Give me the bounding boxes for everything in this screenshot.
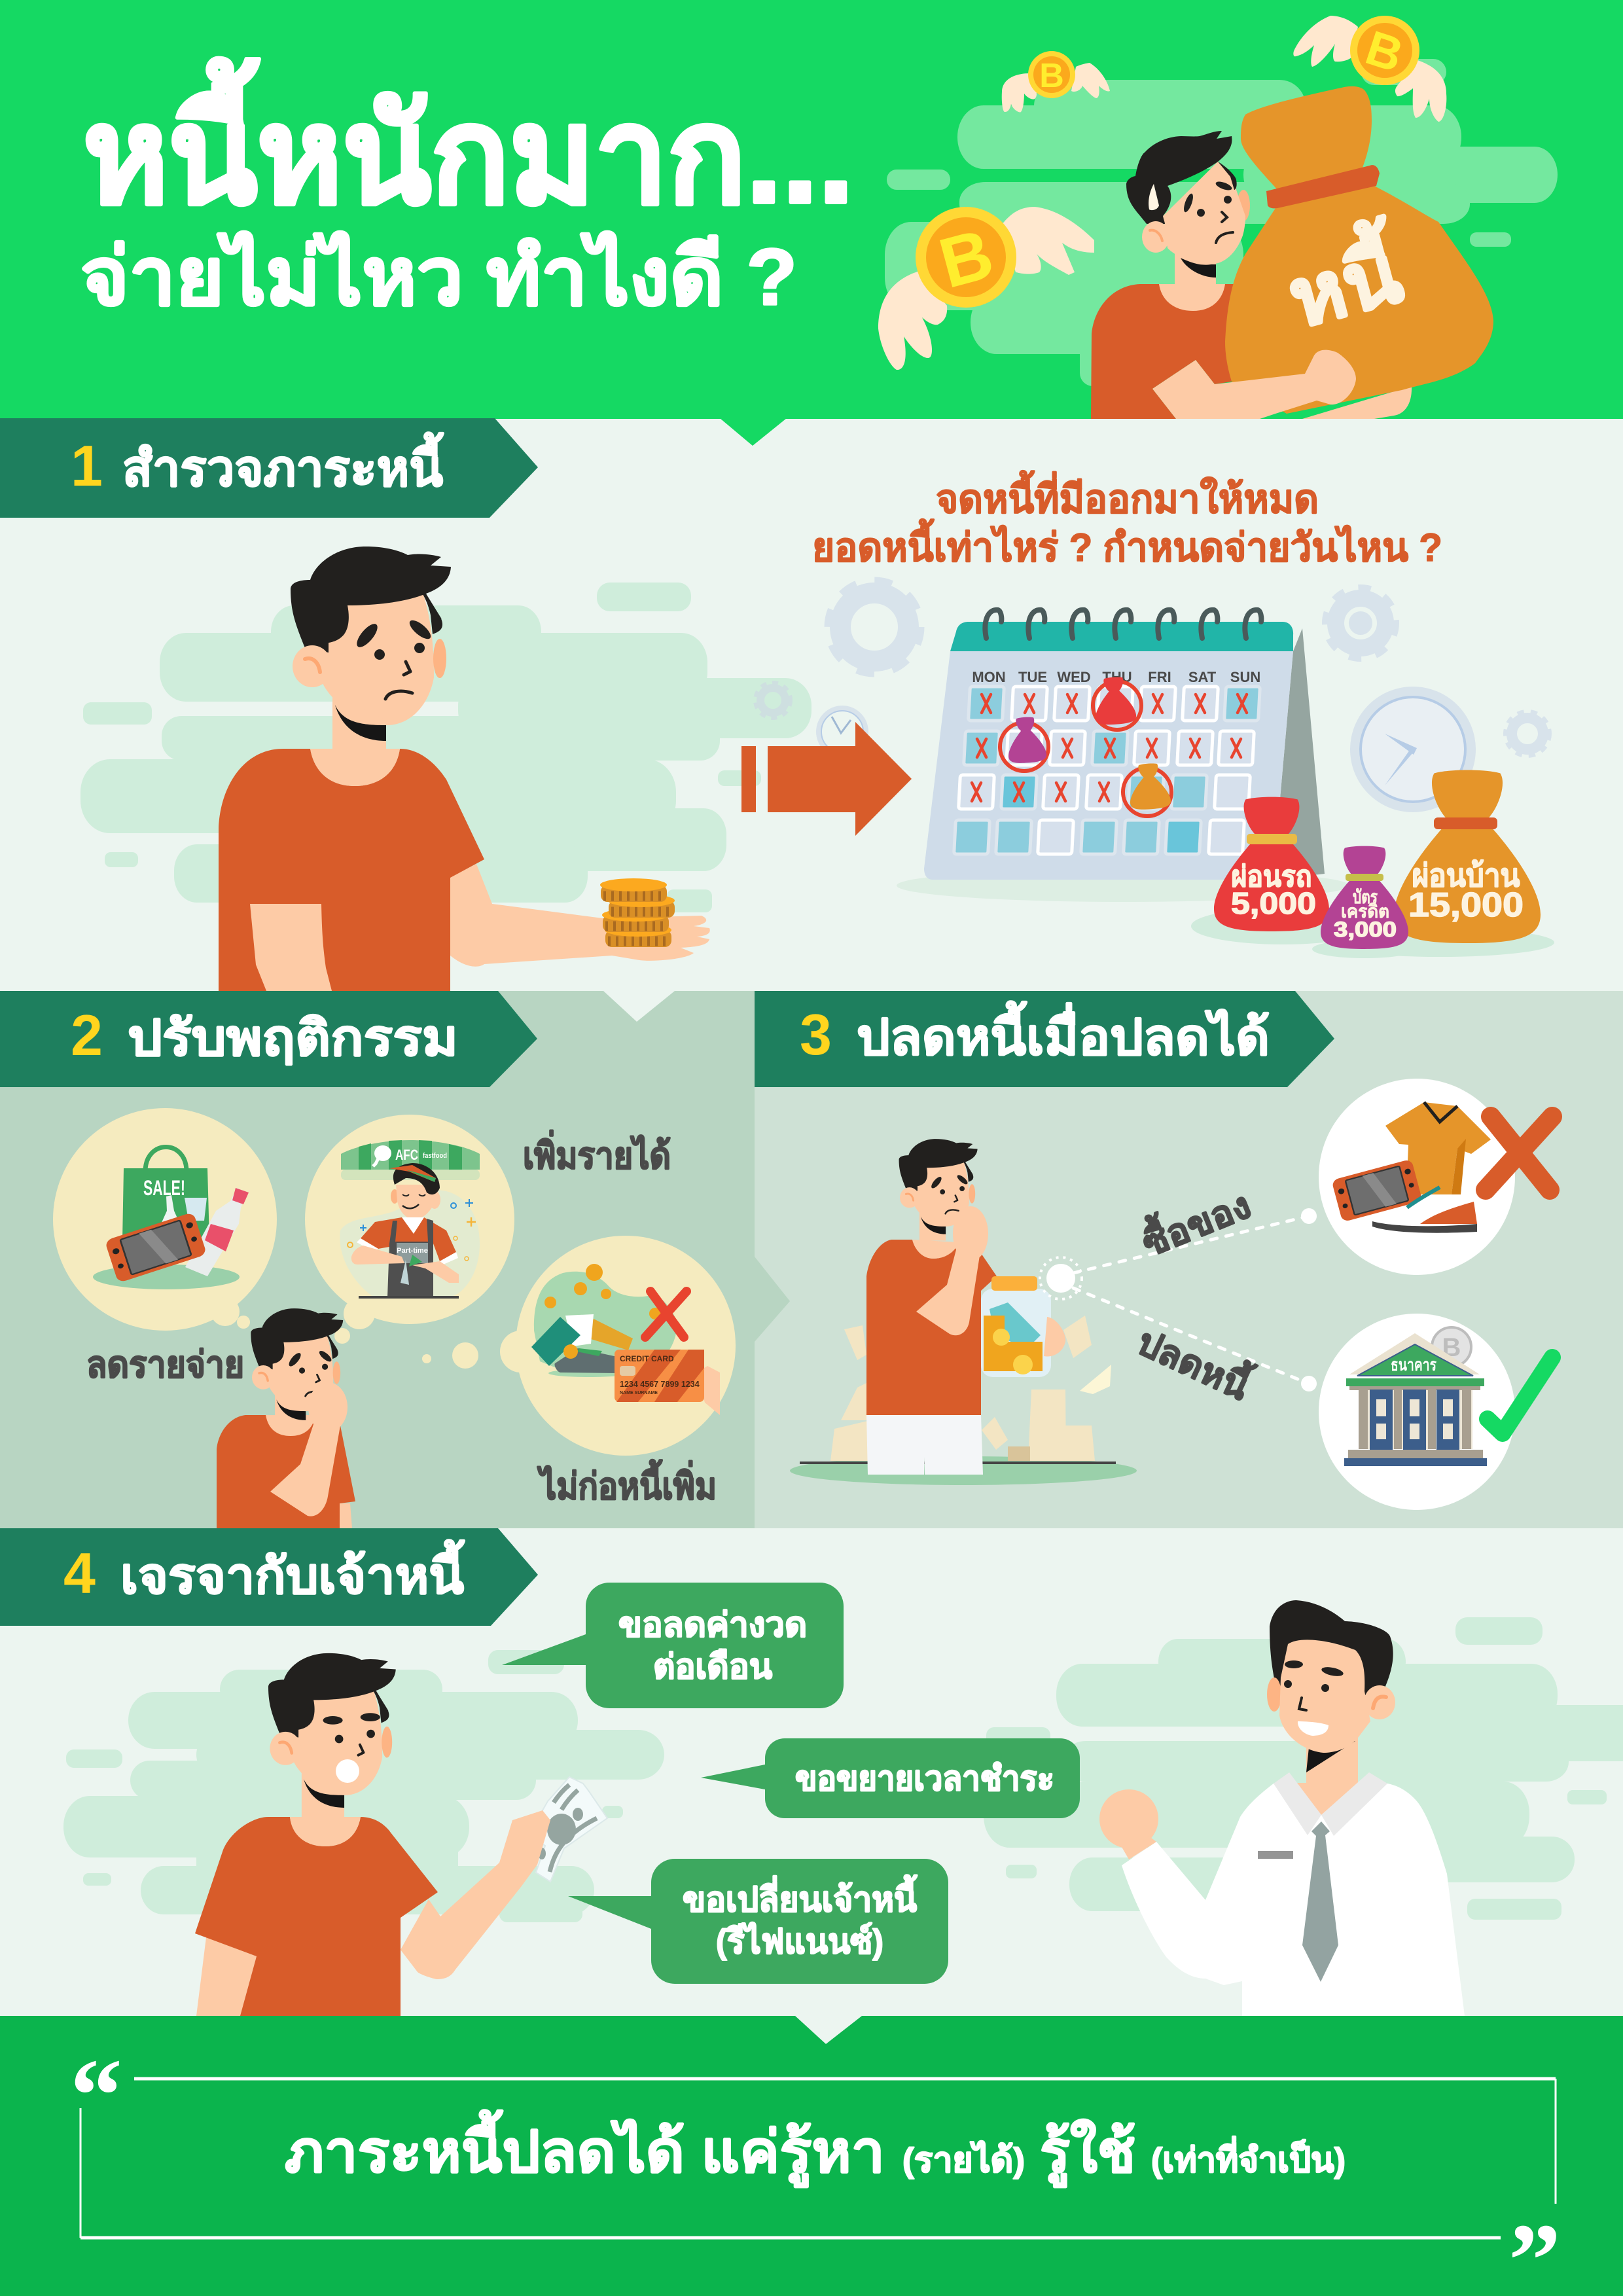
thought bubble: no new debt bbox=[500, 1236, 736, 1456]
panel: section 4 negotiate bbox=[0, 1528, 1623, 2016]
icon: winged coin large bbox=[878, 207, 1094, 370]
speech bubble: refinance: ขอเปลี่ยนเจ้าหนี้ bbox=[683, 1874, 918, 1919]
bag: credit card: เครดิต bbox=[1341, 901, 1389, 922]
icon: red cross bbox=[645, 1291, 687, 1337]
circle: bank with check: ธนาคาร bbox=[1391, 1355, 1436, 1374]
bag: credit card: บัตร bbox=[1353, 887, 1378, 907]
bag: home payment: ผ่อนบ้าน bbox=[1412, 859, 1520, 893]
calendar cells bbox=[954, 687, 1260, 854]
banner: step 4: เจรจากับเจ้าหนี้ bbox=[120, 1539, 465, 1604]
worried head bbox=[1126, 131, 1250, 265]
shoe bbox=[1372, 1187, 1477, 1233]
focus point with dotted paths bbox=[1040, 1208, 1317, 1391]
bag: home payment bbox=[1394, 770, 1541, 943]
icon: winged coin top right: B bbox=[1359, 20, 1410, 82]
panel: footer bbox=[0, 2016, 1623, 2296]
panel: section 1 survey debt bbox=[0, 418, 1554, 991]
man with money bbox=[195, 1653, 607, 2016]
frame bbox=[80, 2079, 1556, 2238]
shop awning: AFC bbox=[395, 1147, 418, 1163]
notch bbox=[720, 418, 787, 446]
notch bbox=[795, 2016, 862, 2044]
background cloud bbox=[80, 583, 812, 912]
banner: step 1: 1 bbox=[71, 433, 103, 498]
calendar weekdays: FRI bbox=[1148, 669, 1171, 685]
banner: step 1 bbox=[0, 418, 538, 518]
debt bag bbox=[1152, 86, 1493, 419]
orange credit card: NAME SURNAME bbox=[620, 1391, 658, 1395]
subtitle: จ่ายไม่ไหว ทำไงดี ? bbox=[80, 232, 797, 321]
icon: winged coin large: B bbox=[931, 213, 1001, 303]
man with savings jar bbox=[790, 1139, 1137, 1485]
orange credit card: CREDIT CARD bbox=[620, 1354, 674, 1363]
coins bbox=[544, 1264, 661, 1319]
man holding coins bbox=[219, 547, 710, 991]
label: no new debt: ไม่ก่อหนี้เพิ่ม bbox=[537, 1460, 717, 1507]
bag: car payment: ผ่อนรถ bbox=[1232, 861, 1311, 893]
circle: bank with check: B bbox=[1442, 1333, 1461, 1362]
orange credit card: 1234 4567 7899 1234 bbox=[620, 1380, 700, 1389]
banner: step 2: 2 bbox=[71, 1003, 103, 1067]
banner: step 2 bbox=[0, 991, 537, 1087]
speech bubble: refinance bbox=[568, 1859, 948, 1984]
conclusion text: (เท่าที่จำเป็น) bbox=[1151, 2136, 1346, 2179]
calendar weekdays: MON bbox=[972, 669, 1006, 685]
notch bbox=[603, 991, 675, 1022]
bag: car payment: 5,000 bbox=[1231, 886, 1316, 920]
calendar weekdays: THU bbox=[1102, 669, 1132, 685]
speech bubble: reduce installment bbox=[502, 1583, 844, 1708]
speech bubble: extend time: ขอขยายเวลาชำระ bbox=[795, 1760, 1054, 1798]
icon: clock bbox=[1350, 687, 1476, 812]
icon: winged coin small: B bbox=[1039, 57, 1064, 95]
banner: step 4: 4 bbox=[63, 1541, 96, 1605]
title: หนี้หนักมาก... bbox=[83, 58, 854, 231]
bag: credit card bbox=[1321, 846, 1408, 949]
conclusion text: ภาระหนี้ปลดได้ แค่รู้หา bbox=[285, 2109, 885, 2188]
heading: list all debts: ยอดหนี้เท่าไหร่ ? กำหนดจ่ายวันไหน ? bbox=[812, 518, 1442, 569]
label: increase income: เพิ่มรายได้ bbox=[523, 1130, 671, 1176]
heading: list all debts: จดหนี้ที่มีออกมาให้หมด bbox=[936, 470, 1319, 521]
icon: winged coin top right bbox=[1293, 16, 1446, 122]
banner: step 4 bbox=[0, 1528, 538, 1626]
arrow bbox=[741, 722, 912, 836]
icon: coin stack bbox=[600, 878, 675, 947]
thought bubble: earn more bbox=[305, 1115, 514, 1329]
opening quote mark: “ bbox=[70, 2037, 122, 2153]
circle: bank with check bbox=[1319, 1314, 1552, 1510]
banner: step 3 bbox=[755, 991, 1334, 1087]
speech bubble: reduce installment: ขอลดค่างวด bbox=[618, 1606, 807, 1644]
debt bag: หนี้ bbox=[1276, 214, 1412, 345]
label: pay off debt: ปลดหนี้ bbox=[1131, 1316, 1258, 1408]
panel: section 3 pay off debt bbox=[755, 991, 1623, 1528]
banner: step 2: ปรับพฤติกรรม bbox=[128, 1011, 458, 1066]
speech bubble: reduce installment: ต่อเดือน bbox=[653, 1648, 772, 1686]
icon: cross bbox=[1486, 1117, 1552, 1190]
speech bubble: extend time bbox=[701, 1738, 1080, 1818]
background cloud left bbox=[63, 1650, 664, 1922]
banner: step 3: ปลดหนี้เมื่อปลดได้ bbox=[857, 1001, 1270, 1066]
panel: header bbox=[0, 0, 1623, 446]
savings jar bbox=[981, 1276, 1051, 1377]
sparkles bbox=[348, 1199, 476, 1261]
calendar weekdays: SAT bbox=[1188, 669, 1217, 685]
thought bubble: reduce spending bbox=[53, 1108, 277, 1331]
t-shirt bbox=[1385, 1102, 1491, 1194]
banknotes bbox=[529, 1777, 607, 1882]
conclusion text: รู้ใช้ bbox=[1040, 2119, 1135, 2188]
shop awning bbox=[341, 1140, 480, 1180]
thinking man bbox=[217, 1308, 355, 1528]
calendar weekdays bbox=[972, 669, 1260, 685]
shop awning: fastfood bbox=[423, 1152, 447, 1160]
conclusion text: (รายได้) bbox=[902, 2140, 1025, 2179]
man carrying debt bag bbox=[1091, 131, 1412, 419]
worker: Part-time bbox=[397, 1247, 428, 1255]
header background cloud bbox=[885, 59, 1558, 386]
banner: step 1: สำรวจภาระหนี้ bbox=[122, 432, 444, 497]
calendar bbox=[897, 610, 1349, 902]
paper piles bbox=[830, 1316, 1111, 1461]
credit cards and reader bbox=[531, 1314, 633, 1373]
icon: small clock bbox=[816, 706, 868, 758]
calendar rings bbox=[985, 610, 1261, 638]
calendar weekdays: WED bbox=[1057, 669, 1091, 685]
conclusion text bbox=[285, 2109, 1346, 2188]
panel: section 2 adjust behaviour bbox=[0, 991, 755, 1528]
icon: winged coin small bbox=[1002, 51, 1110, 112]
speech bubble: refinance: (รีไฟแนนซ์) bbox=[716, 1922, 883, 1961]
background cloud right bbox=[984, 1617, 1623, 1920]
decorative gears bbox=[755, 581, 1549, 755]
debt bags with amounts bbox=[1191, 770, 1554, 958]
section pointer bbox=[755, 1257, 790, 1342]
circle: shopping crossed out bbox=[1319, 1079, 1552, 1275]
banner: step 3: 3 bbox=[800, 1002, 832, 1067]
heading: list all debts bbox=[812, 470, 1442, 569]
banker bbox=[1099, 1600, 1465, 2016]
bag: home payment: 15,000 bbox=[1408, 886, 1524, 924]
bag: credit card: 3,000 bbox=[1334, 918, 1397, 941]
calendar due-date bags bbox=[1000, 676, 1171, 816]
worker bbox=[348, 1163, 476, 1297]
calendar weekdays: SUN bbox=[1230, 669, 1260, 685]
thought dots bbox=[334, 1328, 478, 1369]
thought bubble: reduce spending: SALE! bbox=[143, 1176, 185, 1200]
orange credit card bbox=[615, 1350, 720, 1415]
icon: check bbox=[1488, 1357, 1552, 1433]
bag: car payment bbox=[1214, 797, 1329, 931]
calendar weekdays: TUE bbox=[1018, 669, 1047, 685]
label: buy things: ซื้อของ bbox=[1134, 1179, 1257, 1265]
label: reduce spending: ลดรายจ่าย bbox=[86, 1344, 244, 1385]
